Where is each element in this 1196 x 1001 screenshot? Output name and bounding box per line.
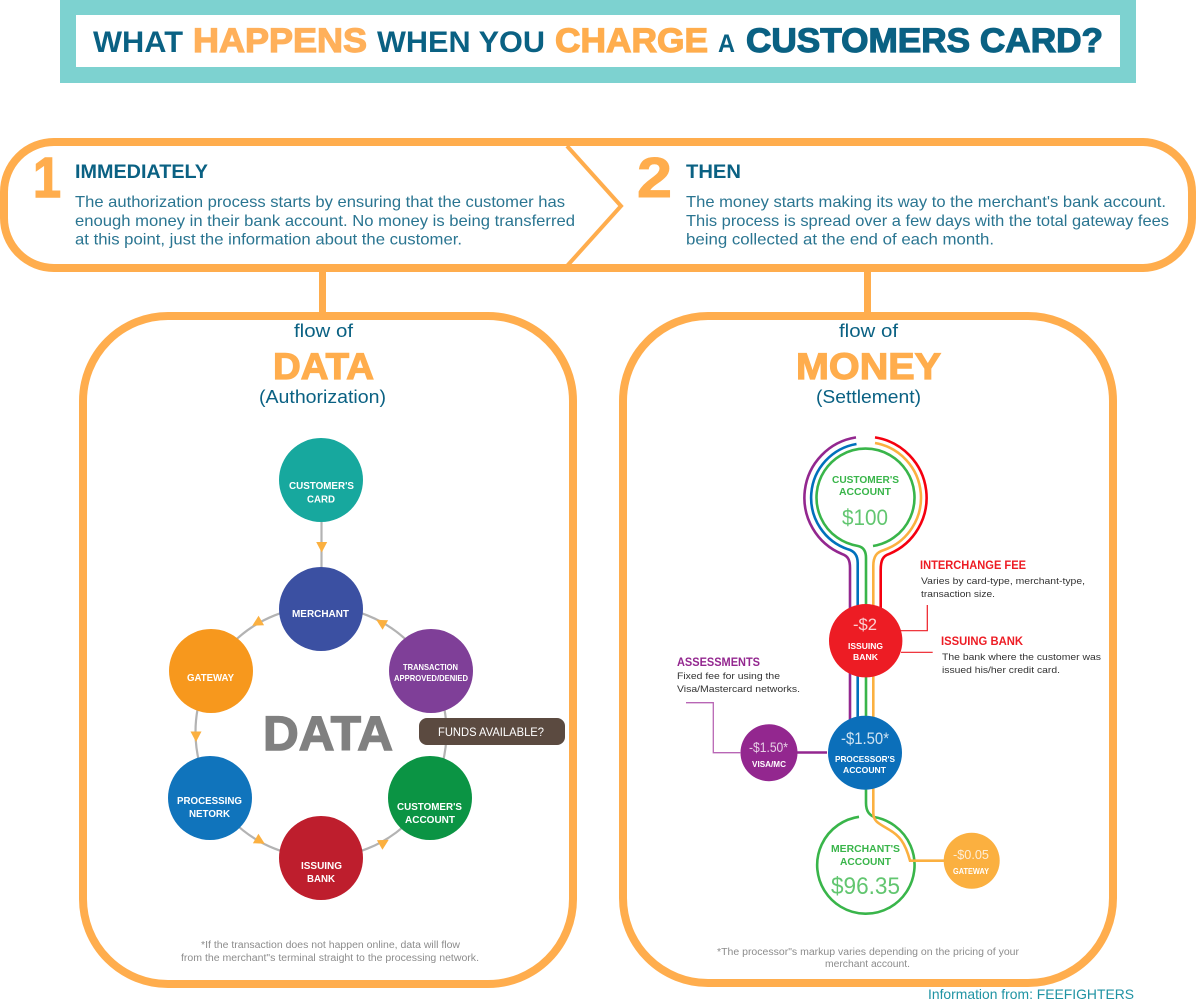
money panel heading — [796, 321, 941, 407]
data panel footnote — [181, 940, 479, 964]
step 2 description: The money starts making its way to the merchant's bank account. — [686, 194, 1166, 211]
callout: assessments: Fixed fee for using the — [677, 671, 780, 682]
step 1 description: The authorization process starts by ensuring that the customer has — [75, 194, 565, 211]
money panel footnote: merchant account. — [825, 959, 910, 970]
callout: assessments: Visa/Mastercard networks. — [677, 684, 800, 695]
node: customer's card: CUSTOMER'S — [289, 480, 354, 492]
customer's account label: ACCOUNT — [839, 487, 891, 498]
node: transaction approved/denied — [389, 629, 473, 713]
title text: CUSTOMERS CARD? — [746, 22, 1103, 60]
center label: data: DATA — [263, 708, 393, 761]
callout: issuing bank — [901, 634, 1101, 676]
node: visa/mc fee — [740, 724, 798, 781]
node: visa/mc fee: VISA/MC — [752, 760, 786, 769]
node: processor's account: -$1.50* — [841, 729, 889, 748]
node: gateway fee — [944, 833, 1000, 889]
title text: WHEN YOU — [377, 26, 545, 59]
step 2 — [637, 146, 1169, 248]
panel: flow of data — [83, 316, 573, 984]
title text: A — [718, 30, 735, 58]
node: processing network: NETORK — [189, 808, 230, 820]
title text: HAPPENS — [193, 22, 367, 60]
money flow diagram — [677, 437, 1101, 914]
node: gateway: GATEWAY — [187, 672, 234, 684]
merchant's account label — [831, 844, 900, 900]
data panel footnote: from the merchant"s terminal straight to the processing network. — [181, 953, 479, 964]
node: customer's account: CUSTOMER'S — [397, 801, 462, 813]
node: issuing bank — [279, 816, 363, 900]
money panel heading: flow of — [839, 321, 899, 341]
step 1 — [33, 146, 575, 248]
callout: issuing bank: ISSUING BANK — [941, 634, 1023, 648]
step 1 description — [75, 194, 575, 248]
callout: issuing bank: issued his/her credit card. — [942, 665, 1060, 676]
node: merchant: MERCHANT — [292, 608, 350, 620]
callout: interchange fee: transaction size. — [921, 589, 995, 600]
callout: assessments: ASSESSMENTS — [677, 655, 760, 669]
title banner — [60, 0, 1136, 83]
callout: assessments — [677, 655, 800, 753]
chevron divider — [567, 146, 621, 266]
data panel heading: flow of — [294, 321, 354, 341]
callout: interchange fee: INTERCHANGE FEE — [920, 558, 1026, 572]
node: issuing bank: ISSUING — [301, 860, 342, 872]
step 1 heading: IMMEDIATELY — [75, 162, 208, 183]
title text — [93, 22, 1103, 60]
node: visa/mc fee: -$1.50* — [749, 739, 788, 755]
node: issuing bank: BANK — [307, 873, 335, 885]
node: processor's account: PROCESSOR'S — [835, 754, 895, 764]
node: issuing bank fee: -$2 — [853, 615, 877, 634]
customer's account label: $100 — [842, 505, 888, 530]
merchant's account label: $96.35 — [831, 873, 900, 900]
step 1 description: enough money in their bank account. No money is being transferred — [75, 213, 575, 230]
merchant's account label: MERCHANT'S — [831, 844, 900, 855]
data panel footnote: *If the transaction does not happen online, data will flow — [201, 940, 461, 951]
node: processor's account: ACCOUNT — [843, 765, 887, 775]
customer's account label — [832, 475, 899, 530]
money panel footnote: *The processor"s markup varies depending on the pricing of your — [717, 947, 1020, 958]
flow ring and connecting lines — [196, 520, 446, 858]
connector: step 1 to data panel — [319, 270, 326, 316]
callout: interchange fee — [900, 558, 1085, 631]
node: gateway fee: GATEWAY — [953, 867, 990, 876]
money panel heading: MONEY — [796, 346, 941, 387]
title text: CHARGE — [555, 22, 708, 60]
flow arrows — [190, 542, 392, 850]
callout: funds available: FUNDS AVAILABLE? — [438, 727, 544, 739]
step 1 description: at this point, just the information about the customer. — [75, 232, 462, 248]
node: merchant — [279, 567, 363, 651]
node: processor's account — [828, 716, 902, 790]
data flow diagram — [168, 438, 565, 900]
title text: WHAT — [93, 26, 183, 59]
step 2 description — [686, 194, 1169, 248]
node: issuing bank fee — [829, 604, 902, 677]
panel: two-step timeline band — [4, 142, 1192, 268]
money panel heading: (Settlement) — [816, 387, 921, 407]
callout: issuing bank: The bank where the customer was — [942, 652, 1101, 663]
node: processing network — [168, 756, 252, 840]
customer's account label: CUSTOMER'S — [832, 475, 899, 486]
node: issuing bank fee: BANK — [853, 652, 879, 662]
node: gateway — [169, 629, 253, 713]
node: transaction approved/denied: APPROVED/DENIED — [394, 673, 468, 683]
money flow lines — [797, 437, 944, 914]
node: customer's account: ACCOUNT — [405, 814, 456, 826]
step 1 number: 1 — [33, 146, 61, 210]
step 2 description: This process is spread over a few days with the total gateway fees — [686, 213, 1169, 230]
money panel footnote — [717, 947, 1020, 970]
callout: funds available — [419, 718, 565, 745]
merchant's account label: ACCOUNT — [840, 857, 891, 868]
node: transaction approved/denied: TRANSACTION — [403, 662, 458, 672]
step 2 number: 2 — [637, 146, 672, 210]
node: processing network: PROCESSING — [177, 795, 242, 807]
step 2 heading: THEN — [686, 162, 741, 183]
node: gateway fee: -$0.05 — [953, 847, 989, 862]
data panel heading — [259, 321, 386, 407]
data panel heading: DATA — [273, 346, 374, 387]
node: customer's account — [388, 756, 472, 840]
step 2 description: being collected at the end of each month. — [686, 232, 994, 248]
panel: flow of money — [623, 316, 1113, 983]
callout: interchange fee: Varies by card-type, merchant-type, — [921, 576, 1085, 587]
node: customer's card: CARD — [307, 494, 335, 506]
data panel heading: (Authorization) — [259, 387, 386, 407]
node: issuing bank fee: ISSUING — [848, 641, 883, 651]
connector: step 2 to money panel — [864, 270, 871, 316]
node: customer's card — [279, 438, 363, 522]
